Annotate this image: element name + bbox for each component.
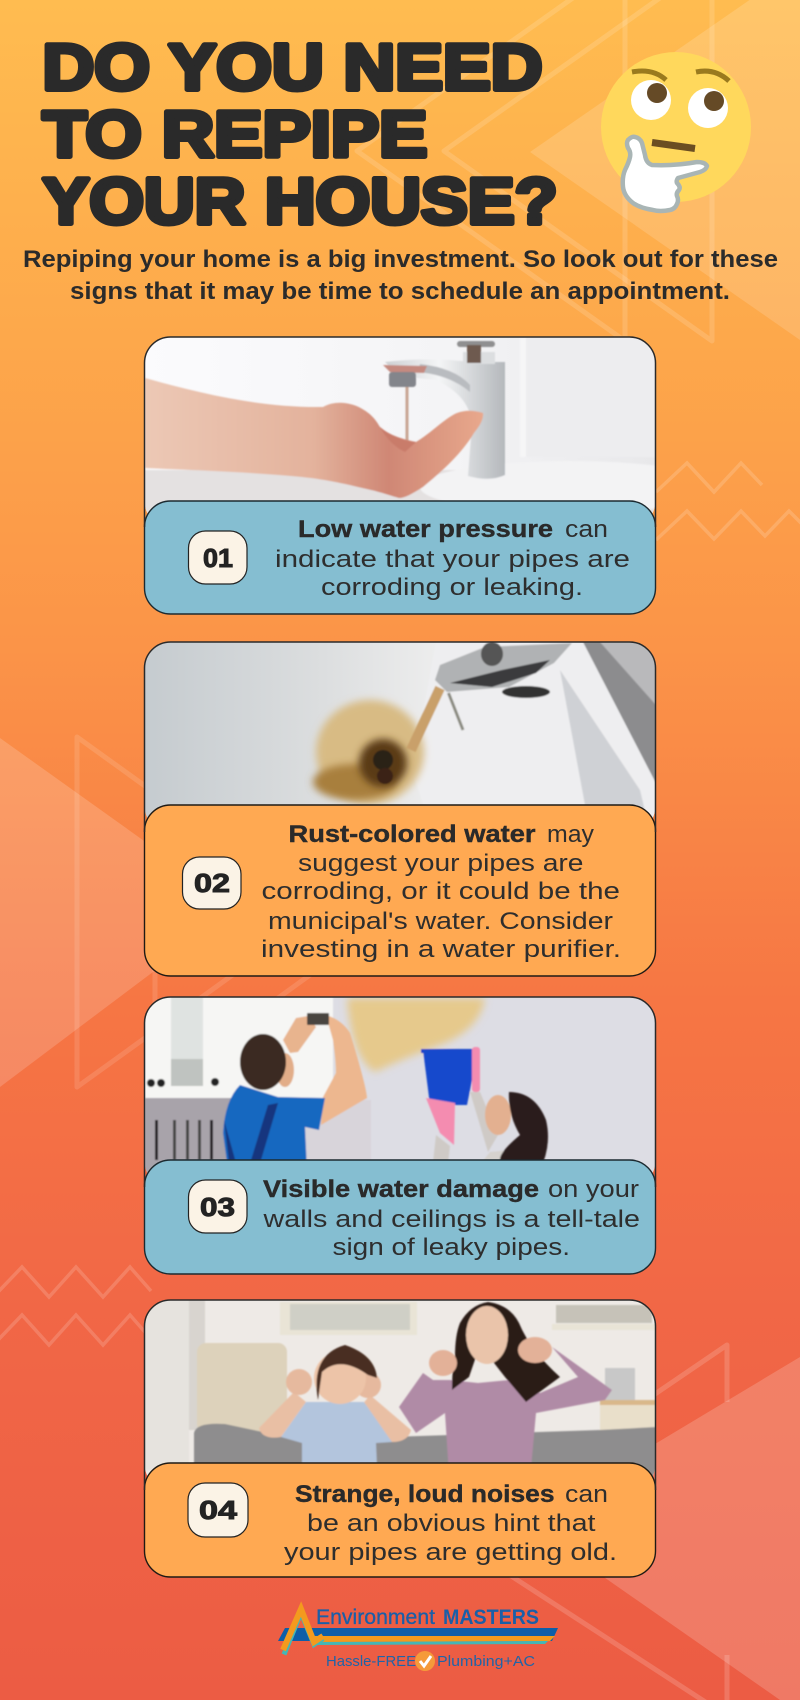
- text panel: orange: [144, 805, 656, 976]
- description text: can: [565, 1481, 608, 1508]
- description text: walls and ceilings is a tell-tale: [262, 1206, 640, 1233]
- description text: corroding, or it could be the: [262, 878, 620, 905]
- description text: [284, 1481, 617, 1566]
- panel: sign 03 visible water damage: [144, 997, 656, 1274]
- description text: on your: [548, 1176, 639, 1203]
- title: TO REPIPE: [42, 98, 428, 170]
- description text: corroding or leaking.: [321, 574, 583, 601]
- logo: Environment Masters: [278, 1606, 558, 1671]
- panel: sign 04 strange loud noises: [144, 1300, 656, 1577]
- badge: 01: [188, 531, 247, 584]
- badge: 02: [182, 857, 241, 909]
- description text: sign of leaky pipes.: [332, 1234, 570, 1261]
- badge: 02: 02: [194, 868, 230, 898]
- photo: mother and child covering ears: [144, 1300, 656, 1490]
- text panel: blue: [144, 1160, 656, 1274]
- description text: your pipes are getting old.: [284, 1539, 617, 1566]
- photo: couple catching a ceiling leak in bucket: [144, 997, 656, 1190]
- panel: sign 02 rust-colored water: [144, 642, 656, 976]
- title: YOUR HOUSE?: [42, 164, 558, 238]
- subtitle text: Repiping your home is a big investment. So look out for these: [23, 246, 778, 273]
- badge: 04: [188, 1483, 248, 1537]
- description text: be an obvious hint that: [307, 1510, 596, 1537]
- text panel: orange: [144, 1463, 656, 1577]
- description text: investing in a water purifier.: [261, 936, 621, 963]
- description text: municipal's water. Consider: [268, 908, 613, 935]
- title: DO YOU NEED: [42, 30, 542, 104]
- description text: may: [547, 821, 594, 848]
- subtitle text: [23, 246, 778, 305]
- description text: Visible water damage: [263, 1176, 539, 1203]
- outline: photo frame: [144, 642, 656, 832]
- photo: rusty water in sink: [144, 642, 656, 832]
- description text: [261, 821, 621, 963]
- photo: hand under trickling faucet: [145, 338, 655, 514]
- description text: [262, 1176, 640, 1261]
- logo: Environment Masters: Hassle-FREE: [326, 1653, 416, 1670]
- description text: Rust-colored water: [288, 821, 536, 848]
- text panel: blue: [144, 501, 656, 614]
- badge: 03: [188, 1180, 247, 1233]
- badge: 04: 04: [199, 1495, 238, 1525]
- badge: 01: 01: [203, 543, 233, 573]
- outline: photo frame: [144, 1300, 656, 1490]
- icon: thinking face emoji: [601, 52, 751, 211]
- outline: photo frame: [144, 997, 656, 1187]
- description text: Strange, loud noises: [295, 1481, 554, 1508]
- outline: photo frame: [144, 337, 656, 527]
- panel: sign 01 low water pressure: [144, 336, 656, 615]
- logo: Environment Masters: Plumbing+AC: [437, 1653, 535, 1670]
- badge: 03: 03: [200, 1192, 235, 1222]
- description text: can: [565, 516, 608, 543]
- title: [42, 30, 558, 238]
- subtitle text: signs that it may be time to schedule an appointment.: [70, 278, 730, 305]
- description text: Low water pressure: [298, 516, 553, 543]
- description text: indicate that your pipes are: [275, 546, 630, 573]
- logo: Environment Masters: Environment: [316, 1606, 435, 1629]
- description text: suggest your pipes are: [298, 850, 584, 877]
- description text: [275, 516, 630, 601]
- logo: Environment Masters: MASTERS: [443, 1606, 539, 1629]
